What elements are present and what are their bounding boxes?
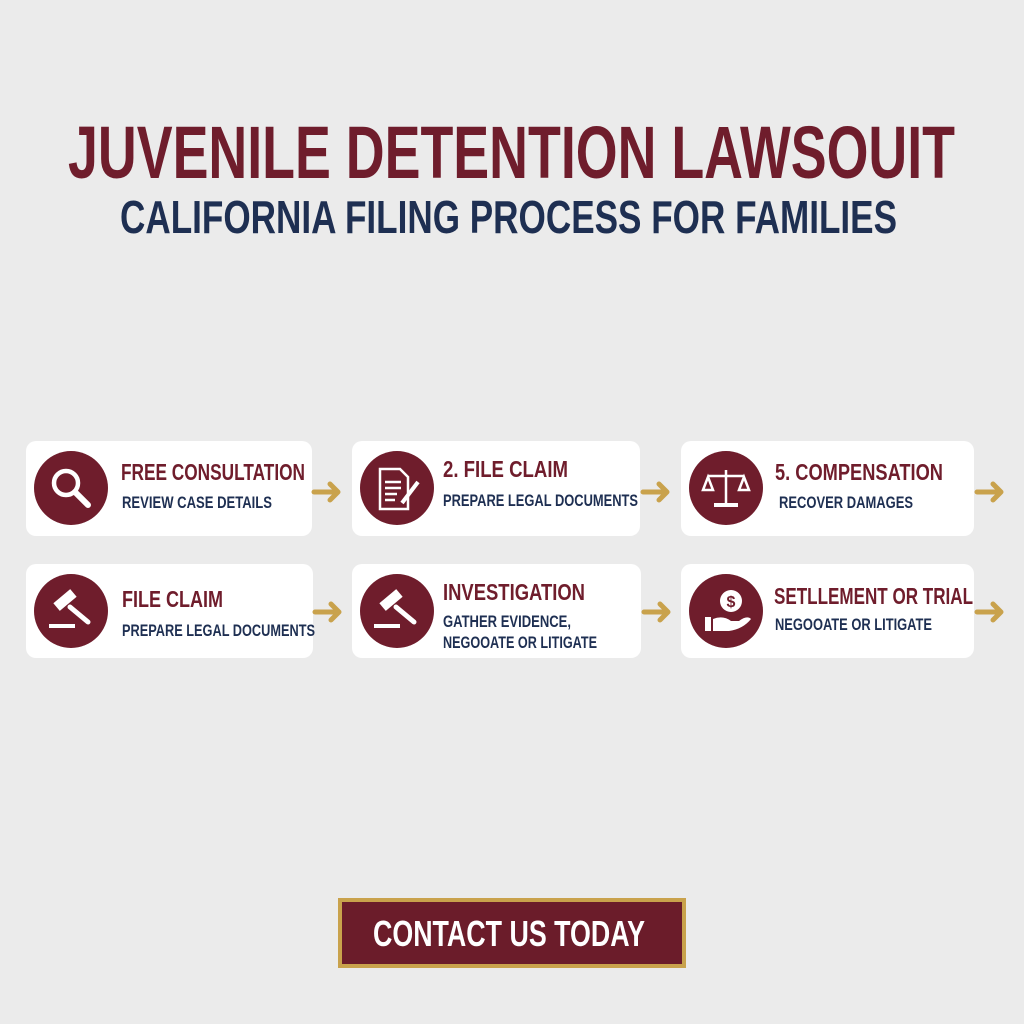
card: free consultation: FREE CONSULTATION [121,459,305,485]
card: investigation: GATHER EVIDENCE, [443,612,571,631]
icon: gavel [49,589,88,628]
icon: magnifier [54,471,88,505]
card: file claim [26,564,315,658]
card: free consultation [26,441,312,536]
button: contact us: CONTACT US TODAY [373,913,645,954]
icon: gavel [374,589,414,628]
card: file claim: FILE CLAIM [122,586,223,612]
card: file claim 2: PREPARE LEGAL DOCUMENTS [443,491,638,510]
card: investigation: NEGOOATE OR LITIGATE [443,633,597,652]
card: compensation: RECOVER DAMAGES [779,493,913,512]
icon: hand with coin: $ [727,594,736,611]
arrows [314,484,1001,620]
card: compensation [681,441,974,536]
icon: document [380,469,418,509]
card: file claim 2: 2. FILE CLAIM [443,456,568,482]
card: investigation [352,564,641,658]
button: contact us [340,900,684,966]
icon: hand with coin [705,590,751,631]
icon: scales [703,470,749,505]
card: settlement: NEGOOATE OR LITIGATE [775,615,932,634]
card: settlement [681,564,974,658]
card: file claim 2 [352,441,640,536]
card: investigation: INVESTIGATION [443,579,585,605]
card: free consultation: REVIEW CASE DETAILS [122,493,272,512]
card: file claim: PREPARE LEGAL DOCUMENTS [122,621,315,640]
card: compensation: 5. COMPENSATION [775,459,943,485]
